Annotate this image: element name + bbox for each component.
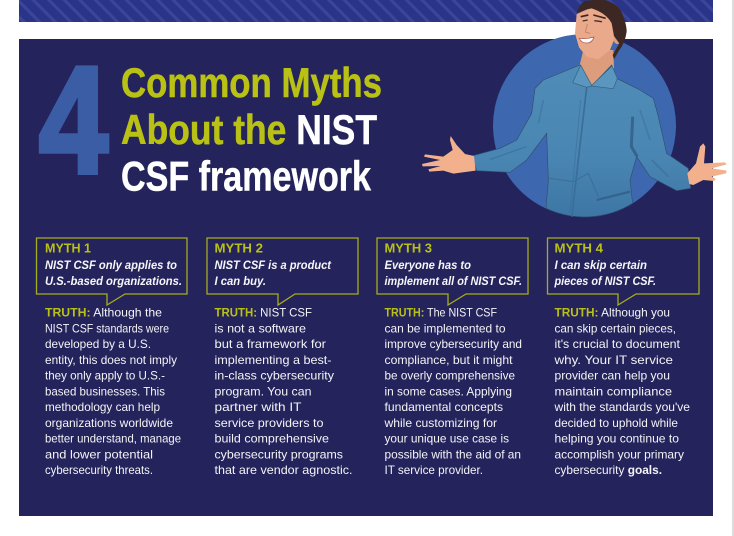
smile — [579, 37, 594, 43]
myth 4 text: I can skip certain — [554, 259, 647, 272]
truth 1 text: cybersecurity threats. — [45, 464, 153, 477]
truth 4 text: provider can help you — [554, 370, 670, 383]
myth 3 text: implement all of NIST CSF. — [384, 275, 522, 288]
truth 2 text: partner with IT — [214, 401, 302, 414]
collar — [573, 65, 617, 89]
truth 4 text: decided to uphold while — [554, 417, 678, 430]
blue circle behind person — [493, 34, 676, 217]
title: About the NIST — [121, 106, 377, 153]
title: CSF framework — [121, 152, 372, 200]
neck — [579, 50, 614, 86]
myth 1 text — [45, 242, 182, 288]
truth 1 text: NIST CSF standards were — [45, 322, 169, 335]
truth 3 text: be overly comprehensive — [384, 370, 515, 383]
truth 2 text: program. You can — [214, 385, 312, 398]
truth 3 text: in some cases. Applying — [384, 385, 512, 398]
ear — [613, 28, 622, 44]
truth 2 text: but a framework for — [214, 338, 326, 351]
truth 4 text: why. Your IT service — [553, 354, 673, 367]
truth 2 text: that are vendor agnostic. — [214, 464, 352, 477]
myth 1 column — [36, 238, 187, 477]
truth 3 text: TRUTH: The NIST CSF — [384, 307, 497, 320]
eyebrows — [581, 15, 606, 18]
truth 3 text: your unique use case is — [384, 433, 509, 446]
speech bubble 1 — [36, 238, 187, 305]
truth 2 text: cybersecurity programs — [214, 448, 343, 461]
title: Common Myths — [121, 59, 382, 106]
eyes — [583, 20, 602, 22]
truth 2 text: service providers to — [214, 417, 324, 430]
myth 1 text: U.S.-based organizations. — [45, 275, 182, 288]
myth 2 text: I can buy. — [214, 275, 266, 288]
truth 4 text: maintain compliance — [554, 385, 672, 398]
truth 3 text: possible with the aid of an — [384, 448, 521, 461]
speech bubble 3 — [377, 238, 528, 305]
truth 1 text — [45, 307, 181, 477]
truth 1 text: they only apply to U.S.- — [45, 370, 165, 383]
truth 2 text — [214, 307, 352, 477]
speech bubble 2 — [207, 238, 358, 305]
myth 4 text — [554, 242, 656, 288]
truth 2 text: in-class cybersecurity — [214, 370, 334, 383]
truth 4 text: cybersecurity goals. — [554, 464, 662, 477]
myth 2 column — [207, 238, 358, 477]
truth 1 text: entity, this does not imply — [45, 354, 177, 367]
shirt shading — [490, 87, 668, 217]
myth 4 text: pieces of NIST CSF. — [554, 275, 656, 288]
truth 3 text: can be implemented to — [384, 322, 506, 335]
big numeral 4: 4 — [39, 36, 108, 206]
truth 2 text: is not a software — [214, 322, 306, 335]
left hand — [422, 136, 476, 174]
truth 3 text: compliance, but it might — [384, 354, 513, 367]
truth 4 text — [553, 307, 690, 477]
hair — [577, 0, 627, 59]
truth 3 text: improve cybersecurity and — [384, 338, 522, 351]
truth 1 text: methodology can help — [45, 401, 161, 414]
myth 3 text: Everyone has to — [384, 259, 471, 272]
striped top banner — [19, 0, 713, 22]
myth 2 text — [214, 242, 332, 288]
shirt — [472, 65, 691, 217]
truth 3 text — [383, 307, 522, 477]
truth 4 text: it's crucial to document — [554, 338, 681, 351]
truth 3 text: IT service provider. — [384, 464, 483, 477]
truth 2 text: implementing a best- — [214, 354, 332, 367]
myth 1 text: MYTH 1 — [45, 242, 91, 256]
truth 1 text: and lower potential — [45, 448, 153, 461]
myth 3 text — [384, 242, 522, 288]
truth 4 text: TRUTH: Although you — [554, 307, 670, 320]
truth 4 text: can skip certain pieces, — [554, 322, 676, 335]
truth 1 text: based businesses. This — [45, 385, 165, 398]
face — [575, 7, 614, 59]
myth 4 column — [548, 238, 699, 477]
photo illustration: smiling man with open arms — [422, 0, 727, 217]
myth 2 text: MYTH 2 — [214, 242, 263, 256]
myth 3 text: MYTH 3 — [384, 242, 432, 256]
myth 2 text: NIST CSF is a product — [214, 259, 332, 272]
truth 4 text: helping you continue to — [554, 433, 680, 446]
title — [121, 59, 382, 200]
speech bubble 4 — [548, 238, 699, 305]
truth 2 text: build comprehensive — [214, 433, 329, 446]
nose shadow — [585, 24, 590, 33]
truth 4 text: accomplish your primary — [554, 448, 684, 461]
truth 2 text: TRUTH: NIST CSF — [214, 307, 312, 320]
right hand — [687, 143, 727, 185]
myth 4 text: MYTH 4 — [554, 242, 603, 256]
truth 1 text: developed by a U.S. — [45, 338, 151, 351]
truth 1 text: TRUTH: Although the — [45, 307, 162, 320]
truth 1 text: better understand, manage — [45, 433, 181, 446]
myth 1 text: NIST CSF only applies to — [45, 259, 177, 272]
truth 1 text: organizations worldwide — [45, 417, 173, 430]
truth 4 text: with the standards you've — [553, 401, 690, 414]
truth 3 text: fundamental concepts — [384, 401, 503, 414]
truth 3 text: while customizing for — [383, 417, 497, 430]
myth 3 column — [377, 238, 528, 477]
